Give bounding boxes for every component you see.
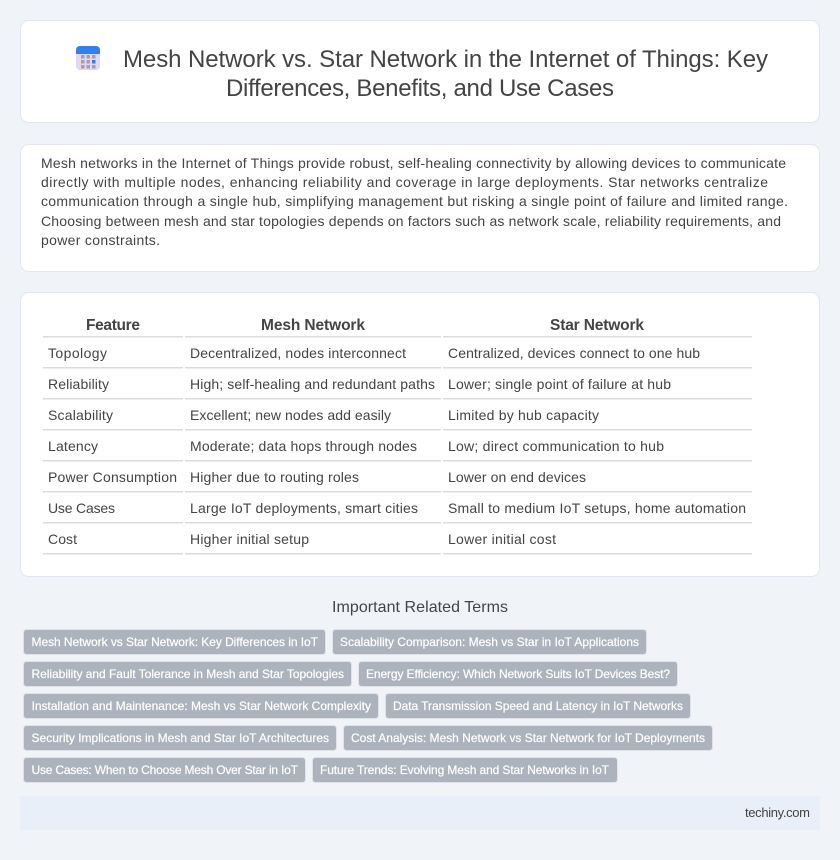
tag: Future Trends: Evolving Mesh and Star Networks in IoT	[320, 763, 610, 777]
tag: Mesh Network vs Star Network: Key Differences in IoT	[32, 635, 319, 649]
table header row: Mesh Network	[261, 317, 365, 334]
panel: title header	[20, 20, 820, 122]
tag	[24, 758, 306, 782]
table row: topology: Centralized, devices connect to one hub	[448, 345, 700, 361]
panel: introduction text: directly with multiple nodes, enhancing reliability and coverage in large deployments. Star networks centralize	[41, 174, 768, 190]
tag	[358, 662, 678, 686]
tag: Use Cases: When to Choose Mesh Over Star in IoT	[32, 763, 299, 777]
footer bar: techiny.com	[745, 805, 810, 820]
table row: power consumption: Lower on end devices	[448, 469, 586, 485]
table row: latency: Latency	[48, 438, 98, 454]
table row: use cases: Use Cases	[48, 500, 115, 516]
table row: power consumption	[43, 469, 752, 492]
tag	[386, 694, 690, 718]
table row: cost	[43, 531, 752, 554]
panel: introduction text: Choosing between mesh and star topologies depends on factors such as network scale, reliability requirements, and	[41, 213, 781, 229]
tag	[344, 726, 712, 750]
footer bar	[20, 796, 820, 830]
table row: cost: Lower initial cost	[448, 531, 556, 547]
table row: latency	[43, 438, 752, 462]
table row: topology: Decentralized, nodes interconnect	[190, 345, 406, 361]
panel: introduction text	[20, 144, 820, 272]
panel: introduction text: power constraints.	[41, 232, 160, 248]
table row: scalability: Limited by hub capacity	[448, 407, 599, 423]
table header row: Feature	[86, 317, 140, 334]
title: Mesh Network vs. Star Network in the Internet of Things: Key	[123, 46, 768, 73]
table row: latency: Low; direct communication to hub	[448, 438, 664, 454]
tag: Scalability Comparison: Mesh vs Star in IoT Applications	[340, 635, 639, 649]
related terms tags	[24, 630, 712, 782]
table header row: Star Network	[550, 317, 644, 334]
tag: Reliability and Fault Tolerance in Mesh and Star Topologies	[32, 667, 344, 681]
tag	[24, 662, 352, 686]
table row: cost: Higher initial setup	[190, 531, 309, 547]
tag: Cost Analysis: Mesh Network vs Star Network for IoT Deployments	[351, 731, 705, 745]
tag	[312, 758, 618, 782]
heading: important related terms: Important Related Terms	[332, 599, 508, 616]
table row: use cases: Small to medium IoT setups, home automation	[448, 500, 746, 516]
tag: Installation and Maintenance: Mesh vs Star Network Complexity	[32, 699, 371, 713]
title	[123, 46, 768, 102]
table row: topology: Topology	[48, 345, 107, 361]
tag	[332, 630, 646, 654]
tag: Data Transmission Speed and Latency in IoT Networks	[393, 699, 683, 713]
icon: calendar	[76, 46, 100, 70]
table row: reliability: High; self-healing and redundant paths	[190, 376, 435, 392]
table row: reliability: Reliability	[48, 376, 109, 392]
table row: reliability: Lower; single point of failure at hub	[448, 376, 671, 392]
table row: scalability	[43, 407, 752, 430]
table row: latency: Moderate; data hops through nodes	[190, 438, 417, 454]
panel: introduction text: Mesh networks in the Internet of Things provide robust, self-healing connectivity by allowing devices to communicate	[41, 155, 786, 171]
tag	[24, 726, 336, 750]
table row: power consumption: Power Consumption	[48, 469, 177, 485]
tag: Energy Efficiency: Which Network Suits IoT Devices Best?	[366, 667, 670, 681]
table row: scalability: Excellent; new nodes add easily	[190, 407, 391, 423]
table header row	[43, 317, 752, 338]
tag	[24, 630, 326, 654]
title: Differences, Benefits, and Use Cases	[226, 75, 614, 102]
table row: scalability: Scalability	[48, 407, 113, 423]
tag	[24, 694, 378, 718]
table row: use cases	[43, 500, 752, 524]
panel: comparison table	[20, 292, 820, 576]
panel: introduction text: communication through a single hub, simplifying management but risking a single point of failure and limited range.	[41, 193, 788, 209]
table row: reliability	[43, 376, 752, 400]
table row: use cases: Large IoT deployments, smart cities	[190, 500, 418, 516]
table row: power consumption: Higher due to routing roles	[190, 469, 359, 485]
table row: topology	[43, 345, 752, 368]
tag: Security Implications in Mesh and Star IoT Architectures	[32, 731, 329, 745]
table row: cost: Cost	[48, 531, 77, 547]
